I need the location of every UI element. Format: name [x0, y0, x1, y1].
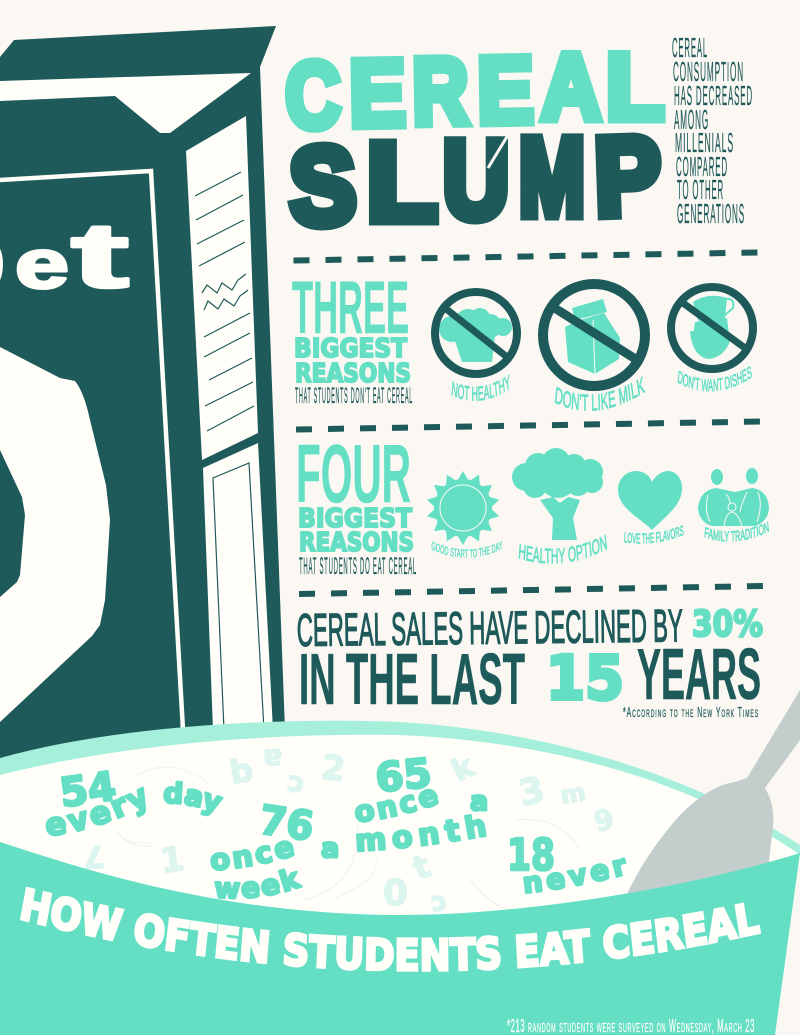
- stat: 18 never: 18: [507, 830, 555, 881]
- heading: three biggest reasons: REASONS: [295, 359, 411, 389]
- faded floating letters: k: [447, 749, 480, 789]
- statistic: 15: 15: [546, 643, 624, 714]
- side panel lower box: [203, 443, 273, 730]
- title word: cereal: C: [285, 42, 341, 148]
- box top flap opening: [0, 73, 251, 133]
- crack in the letter U: [488, 135, 508, 168]
- big letter O on the box: [0, 347, 110, 722]
- milk swirls: [115, 767, 580, 910]
- label: not healthy: NOT HEALTHY: [452, 374, 510, 401]
- title word: cereal: R: [412, 38, 469, 144]
- cereal box: [0, 26, 285, 770]
- side panel nutrition label: [186, 116, 258, 460]
- cereal bowl: [0, 690, 800, 1035]
- spoon: [620, 690, 800, 910]
- title word: slump: L: [367, 121, 437, 244]
- label: don't want dishes: DON'T WANT DISHES: [678, 366, 752, 392]
- statistic: cereal sales decline: [296, 599, 763, 721]
- stat: 65 once a month: 65: [373, 750, 434, 802]
- section: three biggest reasons: [292, 266, 757, 411]
- faded floating letters: 2: [319, 747, 348, 790]
- faded floating letters: c: [429, 888, 449, 920]
- label: good start to the day: GOOD START TO THE DAY: [432, 540, 502, 558]
- bowl front: [0, 842, 800, 1035]
- box body: [0, 26, 285, 770]
- icon: sun: [425, 471, 501, 545]
- bowl rim: [0, 721, 800, 950]
- icon: family: [698, 468, 769, 526]
- intro text: [672, 32, 753, 229]
- faded floating letters: 9: [590, 802, 618, 839]
- intro text: CEREAL: [672, 32, 708, 63]
- faded floating letters: 0: [383, 873, 408, 914]
- stat: 76 once a week: a: [321, 833, 339, 864]
- heading: four biggest reasons: [296, 427, 417, 580]
- cereal brand word: [0, 205, 129, 307]
- stat: 65 once a month: [354, 750, 488, 852]
- title word: slump: P: [593, 114, 663, 239]
- stat: 76 once a week: once: [210, 840, 295, 872]
- title word: cereal: [285, 34, 664, 148]
- label: love the flavors: LOVE THE FLAVORS: [624, 525, 684, 544]
- title word: slump: M: [519, 116, 585, 239]
- stat: 54 every day: [46, 764, 224, 836]
- label: family tradition: FAMILY TRADITION: [704, 521, 770, 542]
- milk surface: [0, 735, 800, 950]
- title word: slump: S: [288, 124, 358, 249]
- stat: 65 once a month: a: [470, 786, 488, 817]
- stat: 54 every day: 54: [57, 764, 119, 817]
- section: three biggest reasons: THAT STUDENTS DON'T EAT CEREAL: [295, 383, 413, 408]
- cereal brand word: t: [71, 205, 129, 307]
- heading: three biggest reasons: [292, 266, 413, 408]
- label: healthy option: HEALTHY OPTION: [518, 534, 608, 564]
- statistic: 30 percent: 30%: [692, 604, 763, 645]
- stat: 54 every day: day: [163, 780, 224, 816]
- section: four biggest reasons: THAT STUDENTS DO EAT CEREAL: [299, 553, 417, 580]
- title word: cereal: E: [349, 40, 406, 146]
- label: don't like milk: DON'T LIKE MILK: [554, 376, 646, 411]
- faded floating letters: 7: [84, 838, 105, 873]
- dashed divider 2: [296, 422, 761, 430]
- title: cereal slump: [285, 34, 664, 249]
- faded floating letters: [84, 743, 618, 920]
- title word: cereal: A: [541, 34, 601, 139]
- intro text: AMONG: [674, 104, 709, 135]
- icon: no dishes: [671, 287, 753, 369]
- heading: three biggest reasons: BIGGEST: [294, 334, 407, 364]
- faded floating letters: a: [263, 743, 282, 776]
- stat: 76 once a week: [210, 797, 339, 900]
- bowl heading: HOW OFTEN STUDENTS EAT CEREAL: [20, 886, 762, 972]
- faded floating letters: 1: [158, 839, 187, 882]
- faded floating letters: m: [558, 778, 588, 810]
- title word: slump: [288, 114, 663, 249]
- stat: 18 never: [507, 830, 626, 894]
- stat: 76 once a week: 76: [257, 797, 316, 850]
- front panel outline: [0, 171, 183, 730]
- title word: cereal: L: [606, 34, 664, 139]
- heading: four biggest reasons: FOUR: [296, 427, 411, 520]
- faded floating letters: b: [227, 750, 256, 792]
- faded floating letters: t: [408, 847, 435, 888]
- section: three biggest reasons: THREE: [292, 266, 409, 349]
- title word: cereal: E: [477, 37, 534, 143]
- dashed divider 3: [299, 586, 764, 594]
- statistic line 2: IN THE LAST: [299, 640, 525, 720]
- faded floating letters: c: [284, 768, 306, 804]
- dashed divider 1: [294, 252, 758, 260]
- section: four biggest reasons: [296, 427, 770, 580]
- icon: no broccoli: [435, 292, 517, 374]
- heading: four biggest reasons: REASONS: [299, 528, 414, 558]
- heading: four biggest reasons: BIGGEST: [298, 504, 412, 534]
- cereal brand word: e: [15, 225, 69, 303]
- title word: slump: U: [443, 119, 509, 242]
- stat: 76 once a week: week: [214, 868, 303, 900]
- icon: broccoli: [512, 448, 603, 540]
- stat: 18 never: never: [523, 857, 626, 894]
- faded floating letters: 3: [515, 769, 548, 815]
- icon: no milk: [543, 284, 645, 386]
- stat: 54 every day: every: [46, 786, 146, 836]
- stat: 65 once a month: month: [356, 814, 487, 852]
- stat: 65 once a month: once: [354, 788, 439, 823]
- icon: heart: [618, 471, 682, 530]
